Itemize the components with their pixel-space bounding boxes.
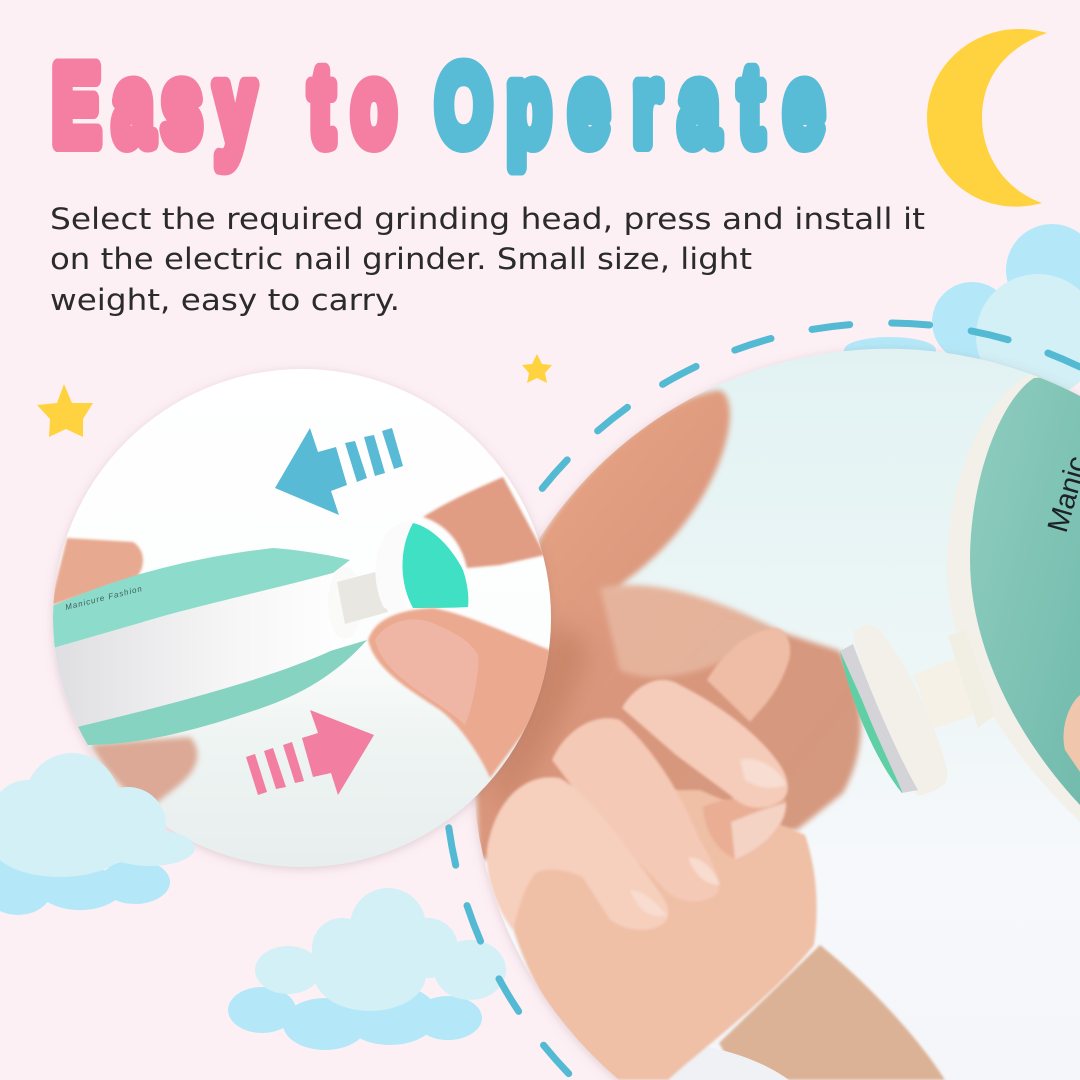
cloud: lower left <box>0 753 195 915</box>
grinder <box>840 372 1080 822</box>
title: Operate <box>436 43 824 168</box>
arm and sleeve <box>719 945 945 1080</box>
baby fingers <box>487 628 790 930</box>
icon: star left <box>37 384 93 437</box>
upper finger <box>423 477 545 568</box>
baby fist <box>500 790 817 1080</box>
description text <box>50 202 925 317</box>
device body <box>77 640 367 745</box>
adult hand <box>476 390 861 860</box>
photo: fingers pressing grinder <box>50 369 555 867</box>
description text: Select the required grinding head, press and install it <box>50 202 925 236</box>
description text: on the electric nail grinder. Small size, light <box>50 242 752 276</box>
dashed ring <box>444 323 1080 1080</box>
title <box>52 43 824 168</box>
title: Easy to <box>52 43 396 168</box>
hand holding device <box>50 538 143 606</box>
cloud: top right <box>844 224 1080 398</box>
cloud: bottom centre <box>228 888 506 1050</box>
icon: crescent moon <box>927 29 1047 207</box>
lower thumb <box>368 608 555 778</box>
adult hand shade <box>495 627 588 796</box>
stem and head <box>328 567 362 639</box>
description text: weight, easy to carry. <box>50 283 400 317</box>
device text: Manicure Fashion <box>64 584 144 612</box>
arrow: blue left <box>275 428 403 515</box>
photo: baby hand and nail grinder <box>470 345 1080 1080</box>
arrow: pink right <box>246 710 374 795</box>
icon: star small <box>522 354 552 383</box>
